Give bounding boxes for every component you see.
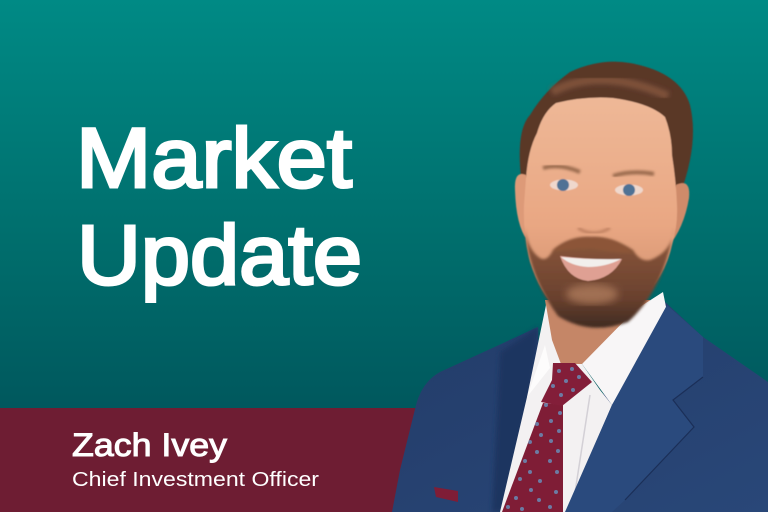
title: Market Update: Market [76,111,352,205]
pocket square [434,487,458,502]
right eye [615,184,643,196]
nose shadow [578,228,610,233]
chin light patch [566,284,618,304]
beard [525,228,674,328]
right lapel [565,305,703,512]
mustache [553,238,633,253]
left eye [550,179,578,191]
tie [502,363,592,512]
head [515,62,693,328]
portrait of Zach Ivey [392,62,768,512]
suit jacket [392,300,768,512]
title: Market Update [76,111,362,302]
neck [545,300,650,364]
ears [515,174,527,240]
title: Market Update: Update [77,208,362,302]
presenter name and role: Zach Ivey [72,427,227,463]
presenter name and role [72,427,319,491]
hair highlights [552,80,668,96]
shirt [500,292,667,512]
face [524,98,677,328]
presenter name and role: Chief Investment Officer [72,469,319,491]
name banner [0,408,420,512]
hair [520,62,693,200]
eyebrows [543,166,654,176]
mouth [560,256,622,281]
